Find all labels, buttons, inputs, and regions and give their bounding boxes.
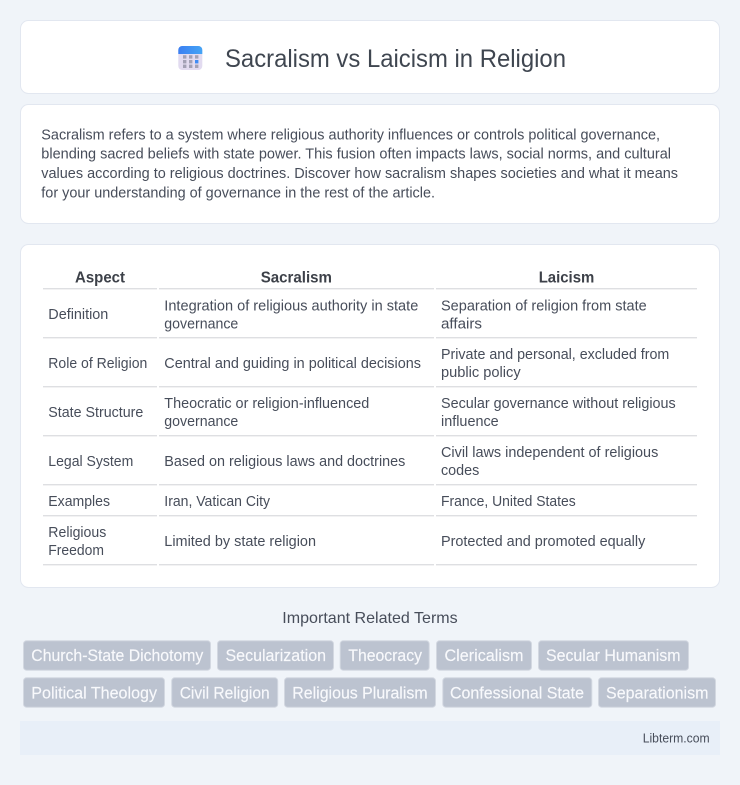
intro text block: Sacralism refers to a system where religious authority influences or controls political governance, [41, 127, 660, 143]
row: examples: Examples [48, 494, 110, 510]
table header row: Aspect [75, 270, 125, 287]
row: state structure: influence [441, 414, 499, 430]
row: state structure: Theocratic or religion-influenced [164, 396, 369, 412]
tag: Clericalism [436, 641, 532, 670]
row: role of religion [43, 347, 697, 387]
row: religious freedom: Limited by state religion [164, 534, 316, 550]
tag: Theocracy [340, 641, 429, 670]
row: religious freedom: Religious [48, 525, 106, 541]
row: definition: governance [164, 316, 238, 332]
row: religious freedom [43, 525, 697, 565]
tag: Church-State Dichotomy [24, 641, 210, 670]
row: definition: Definition [48, 307, 108, 323]
tag: Civil Religion: Civil Religion [180, 684, 270, 702]
tag: Separationism: Separationism [606, 684, 708, 702]
tag: Theocracy: Theocracy [348, 647, 423, 665]
header panel [20, 20, 720, 94]
tag: Religious Pluralism [284, 678, 436, 707]
row: legal system [43, 445, 697, 485]
row: definition: affairs [441, 316, 482, 332]
footer [20, 721, 720, 755]
row: definition: Integration of religious authority in state [164, 298, 418, 314]
row: legal system: codes [441, 463, 479, 479]
footer credit: Libterm.com [643, 730, 710, 745]
tag: Secular Humanism: Secular Humanism [546, 647, 680, 665]
icon: calendar [178, 46, 202, 70]
intro text block: for your understanding of governance in the rest of the article. [41, 185, 435, 201]
tag: Secularization [218, 641, 334, 670]
table header row [43, 270, 697, 289]
row: state structure: Secular governance without religious [441, 396, 676, 412]
row: examples: France, United States [441, 494, 576, 510]
row: state structure: governance [164, 414, 238, 430]
row: state structure: State Structure [48, 405, 143, 421]
intro text block [41, 127, 678, 201]
related terms tags [24, 641, 716, 707]
panel: introduction [20, 104, 720, 224]
tag: Political Theology: Political Theology [31, 684, 158, 702]
table header row: Sacralism [261, 270, 332, 287]
row: legal system: Civil laws independent of religious [441, 445, 658, 461]
tag: Political Theology [24, 678, 164, 707]
intro text block: blending sacred beliefs with state power. This fusion often impacts laws, social norms, and cultural [41, 147, 671, 163]
tag: Civil Religion [172, 678, 278, 707]
row: role of religion: Private and personal, excluded from [441, 347, 669, 363]
row: examples: Iran, Vatican City [164, 494, 271, 510]
row: role of religion: public policy [441, 365, 521, 381]
row: definition [43, 298, 697, 338]
related terms heading: Important Related Terms [282, 610, 458, 627]
tag: Separationism [598, 678, 716, 707]
row: religious freedom: Freedom [48, 543, 104, 559]
row: legal system: Based on religious laws and doctrines [164, 454, 405, 470]
row: definition: Separation of religion from state [441, 298, 647, 314]
intro text block: values according to religious doctrines. Discover how sacralism shapes societies and what it means [41, 166, 678, 182]
row: state structure [43, 396, 697, 436]
tag: Secularization: Secularization [226, 647, 326, 665]
tag: Secular Humanism [538, 641, 688, 670]
table header row: Laicism [539, 270, 594, 287]
row: role of religion: Central and guiding in political decisions [164, 356, 421, 372]
row: examples [43, 494, 697, 516]
row: role of religion: Role of Religion [48, 356, 147, 372]
panel: comparison table [20, 244, 720, 588]
tag: Church-State Dichotomy: Church-State Dichotomy [31, 647, 204, 665]
tag: Confessional State [443, 678, 592, 707]
row: legal system: Legal System [48, 454, 133, 470]
row: religious freedom: Protected and promoted equally [441, 534, 646, 550]
tag: Confessional State: Confessional State [450, 684, 584, 702]
tag: Religious Pluralism: Religious Pluralism [292, 684, 428, 702]
tag: Clericalism: Clericalism [444, 647, 524, 665]
title: Sacralism vs Laicism in Religion [225, 46, 566, 73]
